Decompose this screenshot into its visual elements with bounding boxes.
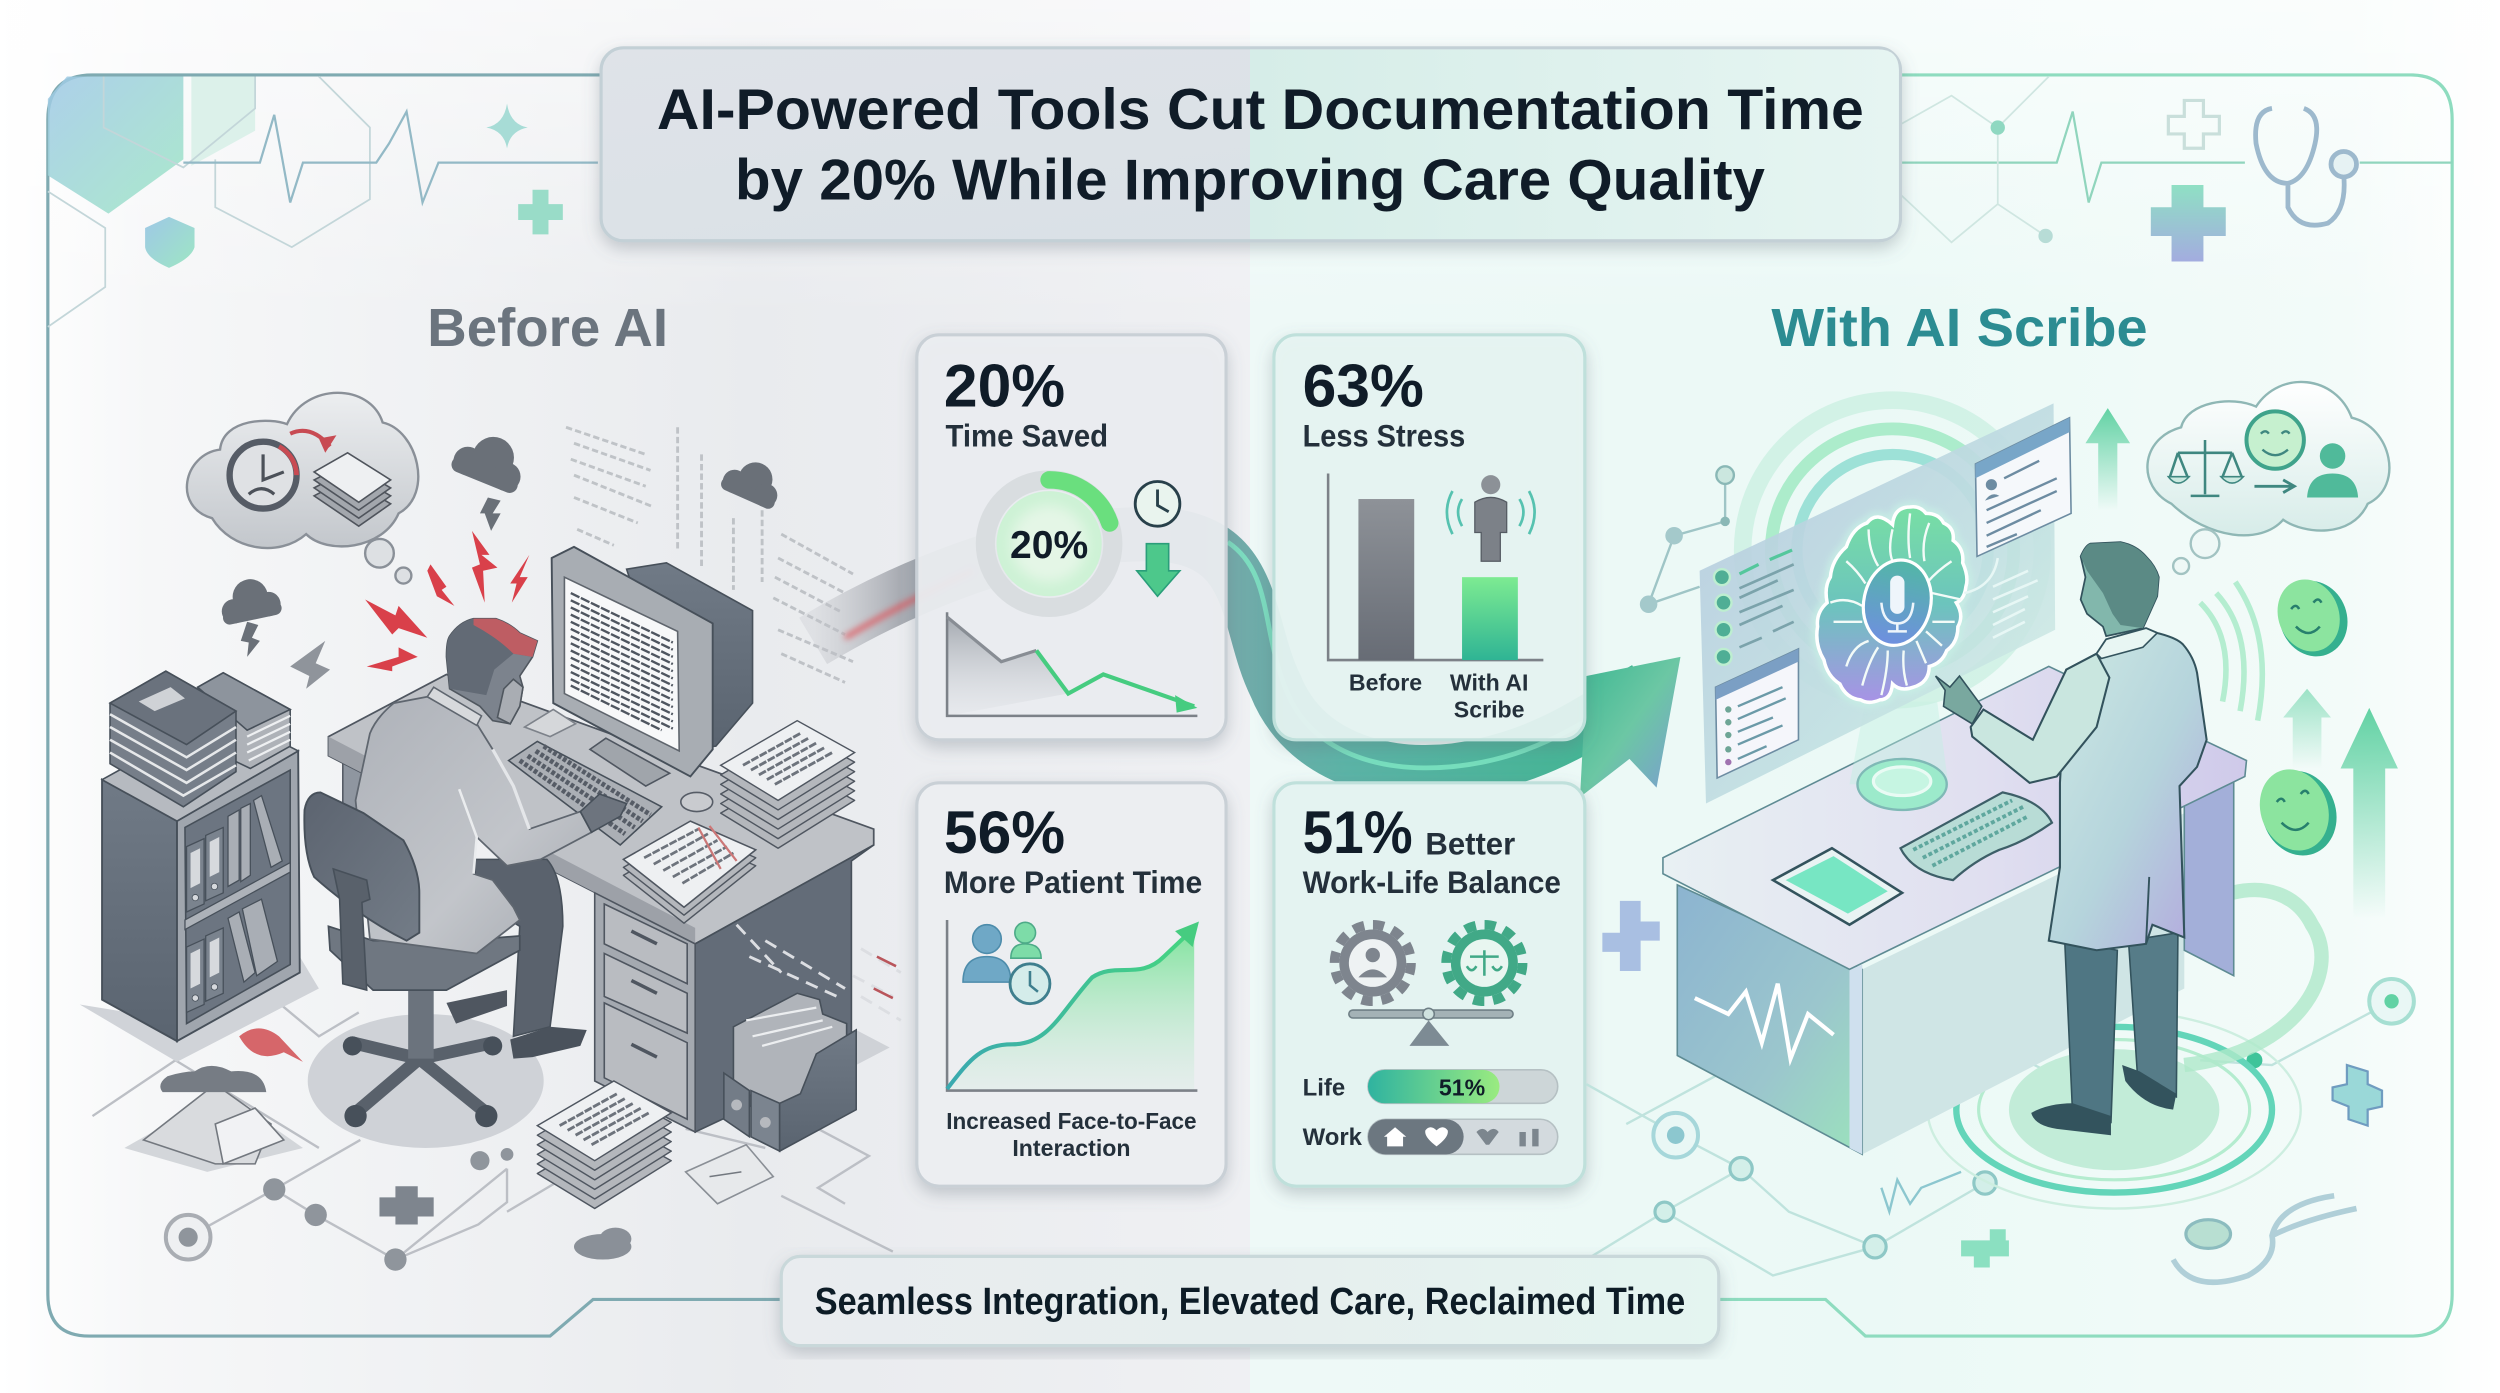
bar chart: With AI <box>1450 669 1528 695</box>
bottom banner <box>781 1256 1719 1346</box>
thought cloud with clock and papers <box>187 393 418 584</box>
stressed doctor: legs <box>446 859 587 1059</box>
card: 56% more patient time: Increased Face-to-Face <box>946 1108 1197 1134</box>
desk <box>328 674 874 1132</box>
folder holder <box>724 993 856 1151</box>
up arrows <box>2085 408 2398 918</box>
line chart down <box>947 612 1197 716</box>
card: 51% better work-life balance: Work-Life Balance <box>1303 865 1561 900</box>
bar chart <box>1328 474 1543 722</box>
projector beam and disc <box>1849 702 1948 810</box>
growth chart <box>947 920 1199 1091</box>
clipboard and letter on floor <box>144 1028 773 1204</box>
floor paper stack <box>537 1081 671 1209</box>
brain with microphone <box>1817 507 1967 702</box>
heading: With AI Scribe: With AI Scribe <box>1771 298 2148 358</box>
card: 20% time saved <box>917 335 1226 740</box>
card: 63% less stress <box>1274 335 1585 740</box>
bar chart: Scribe <box>1454 696 1525 722</box>
paper stacks on desk <box>721 721 855 848</box>
stethoscope chest piece <box>2186 1220 2231 1248</box>
keyboard <box>509 741 662 845</box>
note card top <box>1975 418 2071 556</box>
shadows <box>308 1014 544 1148</box>
small circuit nodes <box>1640 466 1734 613</box>
arrow head <box>1580 657 1680 797</box>
scattered fading document text lines <box>566 427 853 682</box>
tablet <box>1773 848 1902 925</box>
top-right medical decorations <box>1901 77 2452 261</box>
doctor <box>1936 542 2207 1135</box>
stressed doctor: coat <box>356 687 627 953</box>
card: 20% time saved: 20% <box>944 352 1065 420</box>
work bar: Work <box>1303 1124 1363 1151</box>
floor network <box>1586 957 2392 1275</box>
holographic screen <box>1700 403 2071 804</box>
calm person icon <box>1447 475 1535 561</box>
card: 56% more patient time: More Patient Time <box>944 865 1202 900</box>
thought cloud with balance, smile, patient <box>2147 382 2389 574</box>
top-left medical decorations <box>48 77 598 327</box>
smiley faces <box>2249 571 2358 866</box>
card: 56% more patient time: Interaction <box>1012 1135 1131 1161</box>
flow ribbon from before to after <box>813 534 1680 797</box>
outer frame: left <box>48 75 781 1336</box>
arcs above holo screen <box>1743 400 2042 700</box>
card: 56% more patient time <box>917 783 1226 1186</box>
heading: Before AI: Before AI <box>427 298 668 358</box>
chair seat <box>328 926 520 990</box>
card: 63% less stress: 63% <box>1303 352 1424 420</box>
stethoscope <box>2173 1196 2356 1282</box>
gears on balance <box>1335 925 1523 1046</box>
work bar <box>1303 1119 1558 1154</box>
background: left grey half <box>0 0 1250 1393</box>
books on shelf <box>110 671 290 807</box>
card: 20% time saved: Time Saved <box>945 418 1108 453</box>
mouse pad and mouse <box>525 709 713 812</box>
keyboard <box>1901 792 2052 880</box>
life bar: 51% <box>1439 1074 1485 1100</box>
bookshelf <box>102 713 300 1041</box>
signal waves <box>2200 582 2262 721</box>
card: 56% more patient time: 56% <box>944 798 1065 866</box>
progress ring <box>985 480 1113 607</box>
note card bottom <box>1716 649 1798 778</box>
floor network lines <box>92 996 893 1260</box>
title panel <box>601 48 1901 241</box>
patient icons <box>963 922 1050 1004</box>
desk <box>1663 666 2246 1154</box>
card: 51% better work-life balance: 51% <box>1303 798 1413 866</box>
chair back <box>304 792 419 990</box>
title text: AI-Powered Tools Cut Documentation Time <box>657 78 1864 142</box>
life bar <box>1303 1070 1558 1103</box>
illustration: stressed doctor before AI <box>80 393 901 1271</box>
crosses <box>1602 901 2382 1126</box>
stressed doctor: head <box>446 619 537 724</box>
floor nodes <box>263 1148 513 1271</box>
background top fade <box>0 0 2500 319</box>
life bar: Life <box>1303 1074 1345 1101</box>
outer frame: right <box>1719 75 2452 1336</box>
background: right mint half <box>1250 0 2500 1393</box>
storm clouds and lightning <box>216 425 787 689</box>
floor rings <box>1928 890 2322 1209</box>
chair base <box>343 985 502 1127</box>
bottom banner: Seamless Integration, Elevated Care, Reclaimed Time <box>815 1280 1685 1323</box>
checklist <box>1714 550 1794 665</box>
red stress bolts <box>365 531 529 671</box>
card: 51% better work-life balance <box>1274 783 1585 1186</box>
monitor <box>552 547 753 786</box>
progress ring: 20% <box>1010 524 1088 567</box>
title text <box>657 78 1864 212</box>
illustration: doctor with AI scribe <box>1586 382 2414 1282</box>
faded broken lines <box>737 925 901 1020</box>
clock and down arrow <box>1135 481 1180 596</box>
bar chart: Before <box>1349 669 1422 695</box>
title text: by 20% While Improving Care Quality <box>735 148 1765 212</box>
card: 63% less stress: Less Stress <box>1303 418 1465 453</box>
floor nodes <box>1655 1158 1996 1258</box>
card: 51% better work-life balance: Better <box>1425 827 1515 862</box>
